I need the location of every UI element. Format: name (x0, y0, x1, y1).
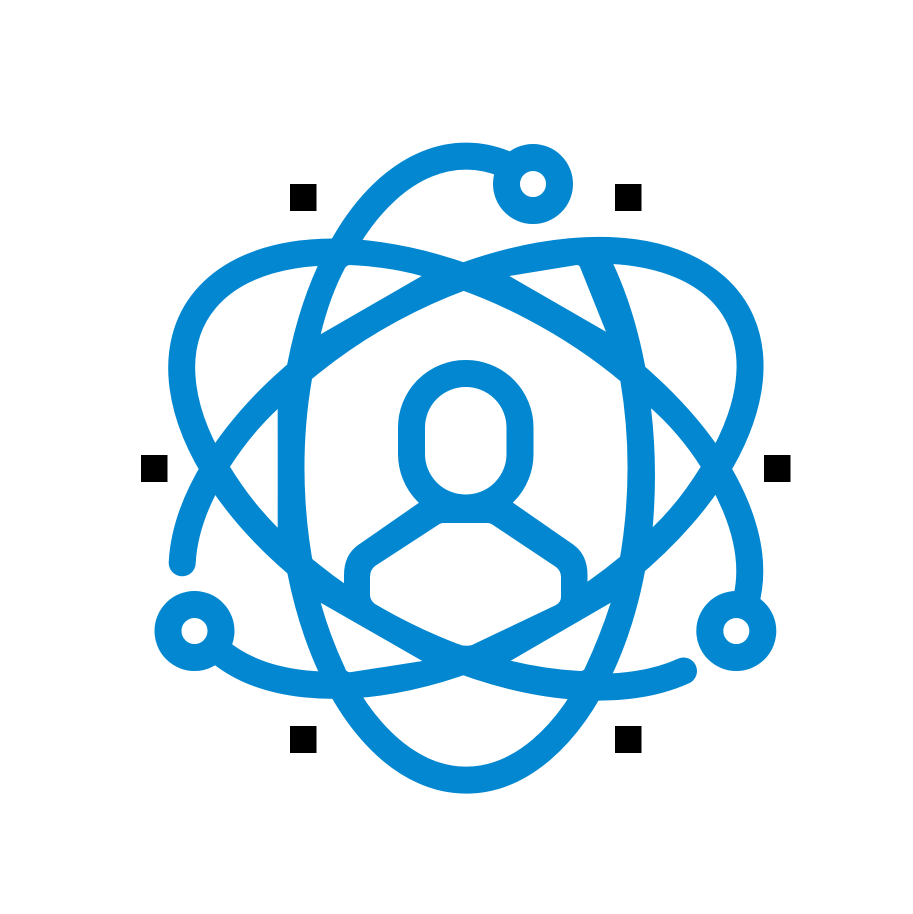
opening: right (651, 408, 701, 527)
person head (412, 374, 520, 508)
orbit crossing openings (230, 265, 701, 672)
opening: bottom right (511, 603, 611, 671)
electron: right (710, 604, 763, 658)
marker: top right (615, 184, 642, 211)
opening: top right (509, 265, 606, 332)
marker: top left (290, 184, 316, 211)
opening: left (230, 409, 278, 528)
marker: middle right (764, 455, 790, 482)
electron: left (168, 604, 221, 658)
black corner markers (141, 184, 790, 753)
crossing fill: top right (600, 328, 622, 356)
marker: bottom right (615, 726, 642, 753)
opening: top left (321, 265, 422, 334)
marker: bottom left (290, 726, 316, 753)
atom orbits (182, 156, 750, 780)
marker: middle left (141, 455, 168, 482)
icon: person (358, 374, 574, 646)
electrons (168, 158, 763, 658)
electron: top (506, 158, 560, 210)
person shoulders (358, 506, 574, 600)
opening: bottom left (321, 603, 422, 672)
orbit: vertical ellipse (291, 156, 641, 780)
person body opening (370, 523, 561, 646)
orbit: tilted ellipse rising to the right (182, 250, 750, 685)
orbit: tilted ellipse falling to the right (182, 252, 750, 687)
